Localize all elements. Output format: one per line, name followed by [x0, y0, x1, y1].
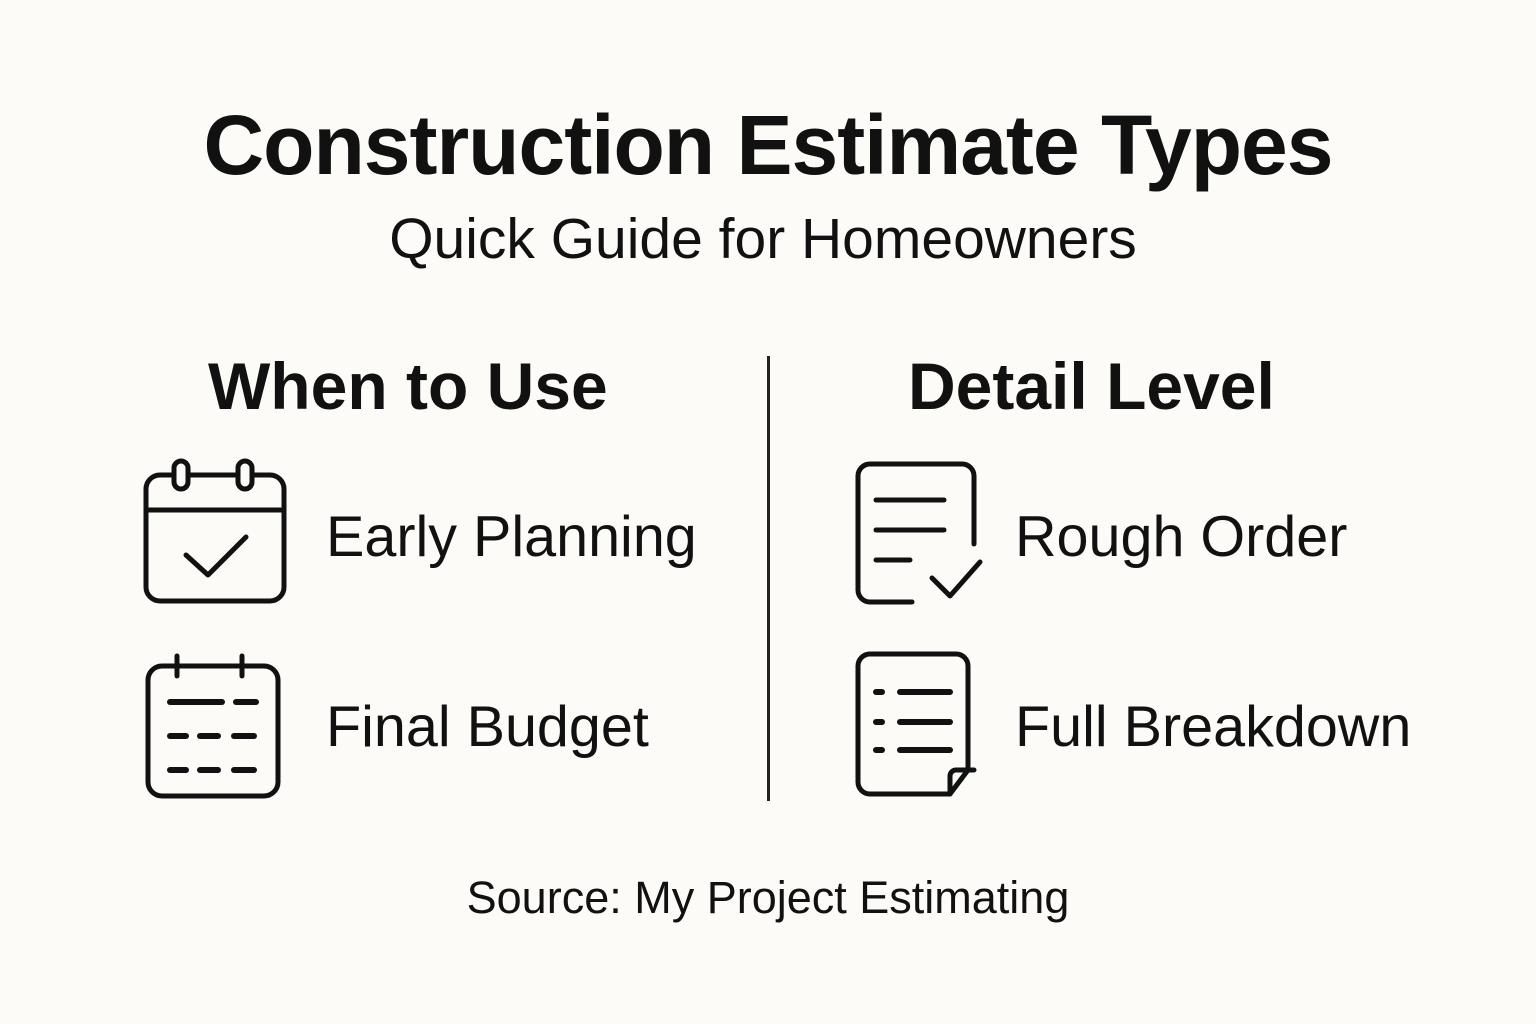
icon: document list — [856, 652, 976, 796]
heading: detail level: Detail Level — [908, 349, 1275, 423]
divider — [767, 356, 770, 801]
icon: calendar list — [146, 654, 280, 798]
source: Source: My Project Estimating — [467, 872, 1069, 923]
title: Construction Estimate Types — [204, 98, 1332, 192]
text: full breakdown: Full Breakdown — [1015, 695, 1411, 759]
text: final budget: Final Budget — [326, 695, 649, 759]
icon: calendar check — [144, 458, 286, 604]
text: rough order: Rough Order — [1015, 505, 1347, 569]
icon: document check — [856, 462, 982, 604]
text: early planning: Early Planning — [326, 505, 697, 569]
subtitle: Quick Guide for Homeowners — [389, 207, 1137, 271]
heading: when to use: When to Use — [208, 349, 608, 423]
